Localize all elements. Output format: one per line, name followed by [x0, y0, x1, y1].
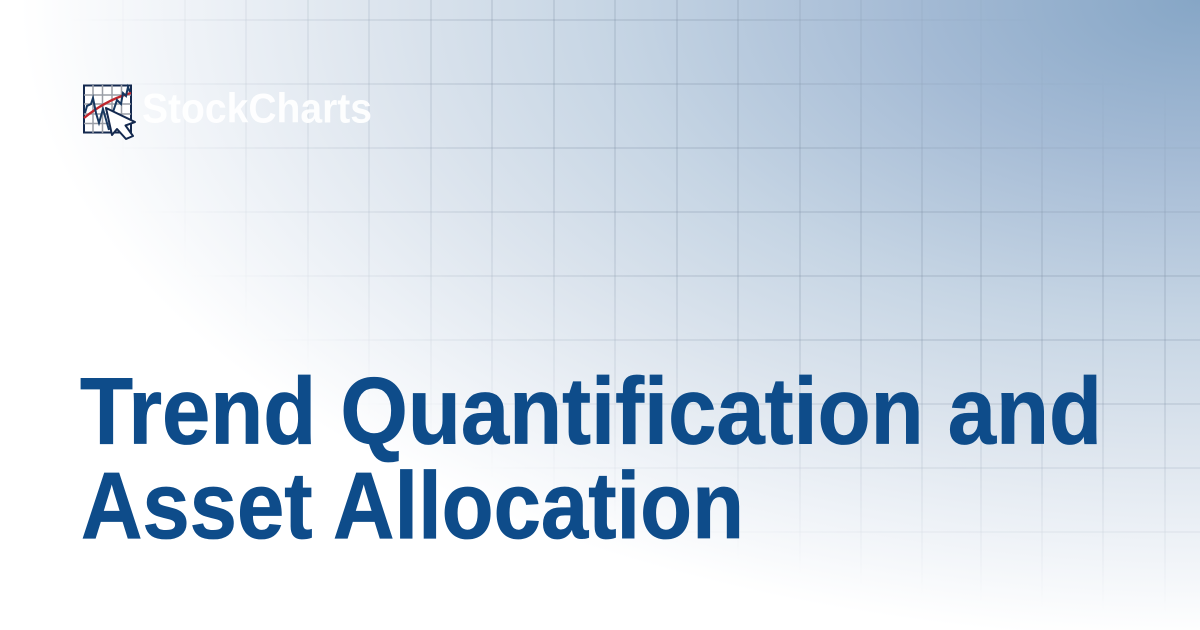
logo wordmark: StockCharts — [142, 84, 372, 132]
logo: StockCharts — [84, 84, 372, 139]
icon: chart with cursor — [84, 85, 135, 139]
title — [80, 358, 1102, 559]
title line 1: Trend Quantification and — [80, 358, 1102, 464]
title line 2: Asset Allocation — [81, 453, 744, 559]
background grid — [168, 0, 1200, 560]
